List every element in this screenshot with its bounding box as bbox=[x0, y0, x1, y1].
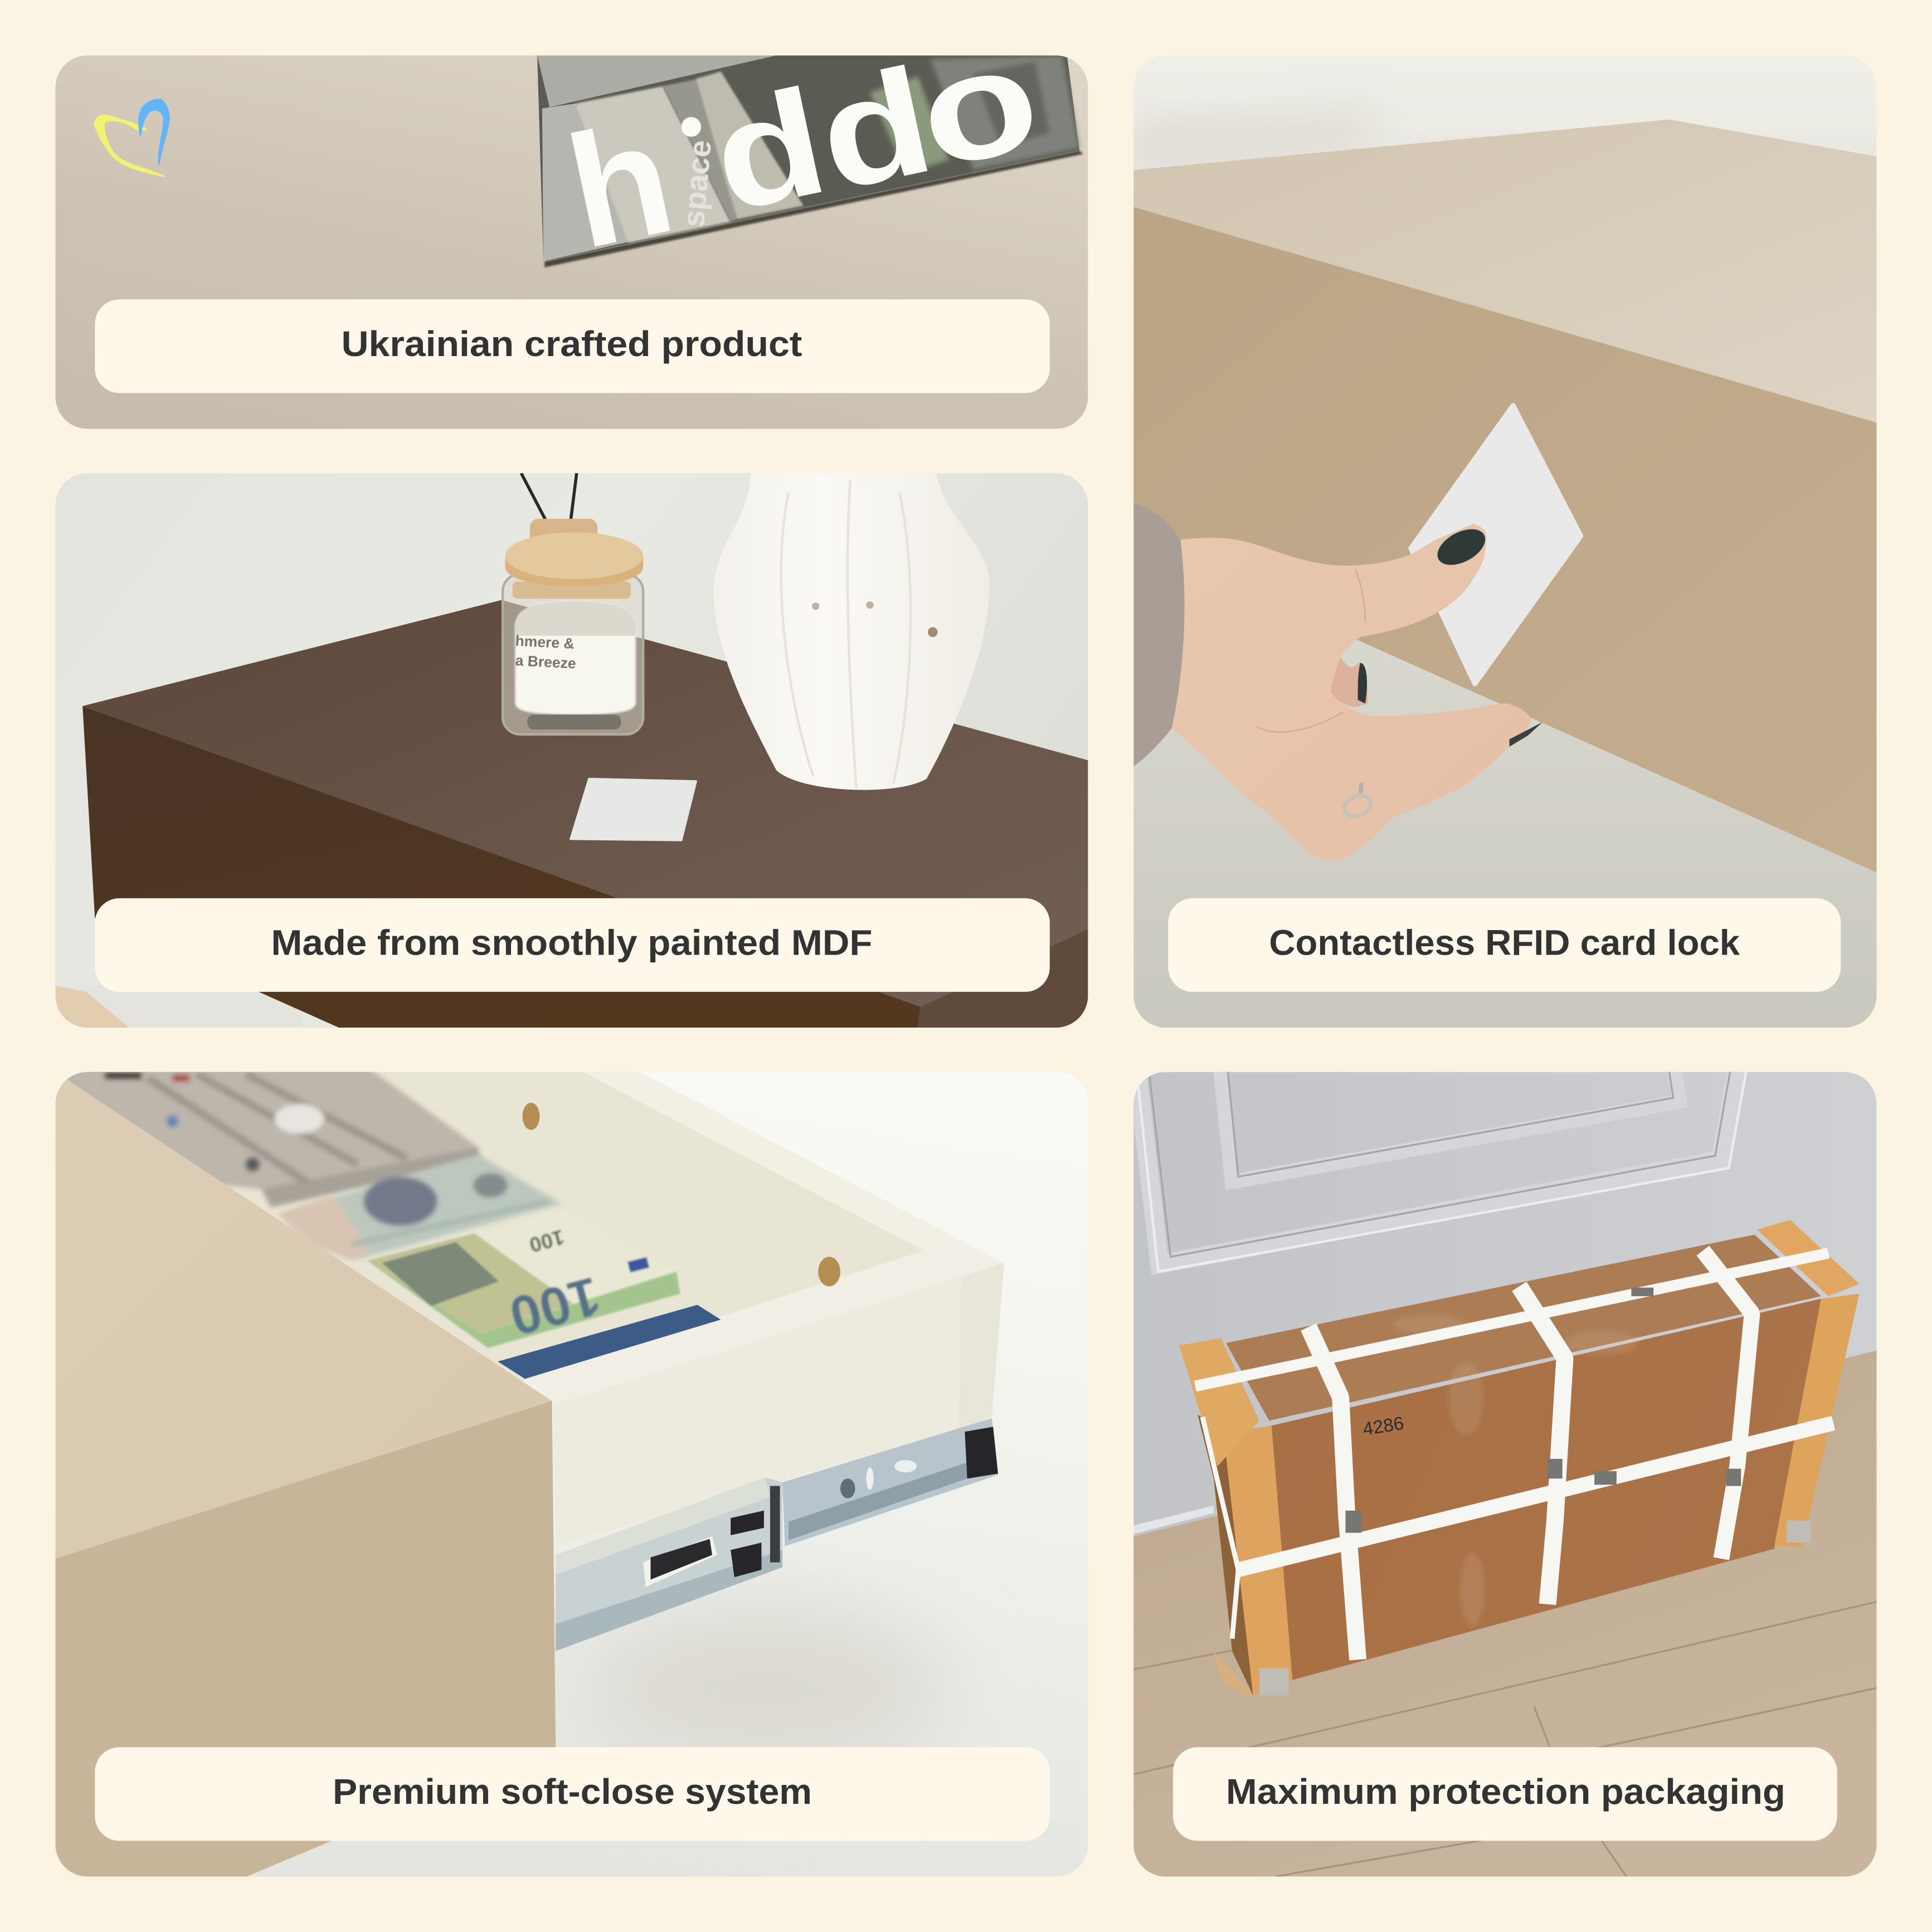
magazine wordmark: space bbox=[676, 139, 718, 228]
caption text: Made from smoothly painted MDF bbox=[271, 923, 872, 963]
hand bbox=[1172, 522, 1542, 862]
ring bbox=[1342, 782, 1374, 820]
magazine wordmark: d bbox=[805, 36, 946, 222]
open drawer bbox=[37, 1060, 1004, 1546]
blue passport bbox=[498, 1305, 721, 1379]
caption text: Maximum protection packaging bbox=[1226, 1772, 1785, 1812]
beige box corner bbox=[55, 1072, 556, 1877]
wrapped package bbox=[1179, 1220, 1860, 1698]
brass screws bbox=[523, 1103, 840, 1286]
jar label: hmere & bbox=[515, 632, 575, 652]
white card bbox=[571, 778, 696, 840]
magazine wordmark: d bbox=[699, 56, 840, 244]
magazine photo bbox=[537, 56, 1084, 269]
sleeve bbox=[1133, 503, 1189, 766]
diffuser bbox=[521, 473, 597, 546]
caption pill bbox=[1173, 1747, 1837, 1841]
white vase bbox=[713, 473, 990, 790]
panel: Made from smoothly painted MDF bbox=[55, 473, 1088, 1028]
jewelry tray bbox=[37, 1060, 480, 1208]
thumb nail bbox=[1432, 522, 1491, 572]
icon: Ukraine heart logo bbox=[95, 100, 169, 176]
handwritten box number: 4286 bbox=[1361, 1413, 1405, 1440]
wall shadow bbox=[579, 1602, 949, 1774]
euro bills: 100 bbox=[504, 1265, 607, 1347]
dollar bills bbox=[277, 1155, 562, 1261]
caption text: Contactless RFID card lock bbox=[1269, 923, 1740, 963]
wooden floor bbox=[1133, 1350, 1877, 1877]
wooden lid bbox=[505, 532, 643, 586]
door mouldings bbox=[1136, 1061, 1747, 1272]
caption text: Ukrainian crafted product bbox=[341, 324, 802, 364]
euro bills bbox=[367, 1210, 680, 1348]
magazine wordmark: o bbox=[904, 12, 1053, 201]
tape scuffs bbox=[1393, 1315, 1639, 1627]
panel: Contactless RFID card lock bbox=[1133, 55, 1877, 1028]
magazine wordmark bbox=[571, 65, 1031, 246]
caption pill bbox=[1168, 898, 1841, 992]
euro bills: 100 bbox=[527, 1225, 567, 1257]
caption pill bbox=[95, 299, 1050, 393]
jar label bbox=[515, 632, 576, 672]
metal clips bbox=[1346, 1288, 1741, 1533]
candle jar bbox=[503, 532, 643, 734]
brown table bbox=[82, 600, 1088, 1028]
staple plates bbox=[1259, 1520, 1811, 1695]
white straps bbox=[1195, 1250, 1833, 1660]
caption pill bbox=[95, 1747, 1050, 1841]
jar label: a Breeze bbox=[515, 652, 576, 672]
caption pill bbox=[95, 898, 1050, 992]
soft-close rail bbox=[556, 1418, 998, 1651]
caption text: Premium soft-close system bbox=[333, 1772, 812, 1812]
beige box bbox=[1133, 119, 1877, 872]
magazine wordmark: h bbox=[554, 87, 687, 282]
panel: Maximum protection packaging bbox=[1133, 1061, 1877, 1877]
RFID card bbox=[1411, 405, 1581, 684]
panel: Ukrainian crafted product bbox=[56, 56, 1088, 429]
panel: Premium soft-close system bbox=[37, 1060, 1088, 1877]
